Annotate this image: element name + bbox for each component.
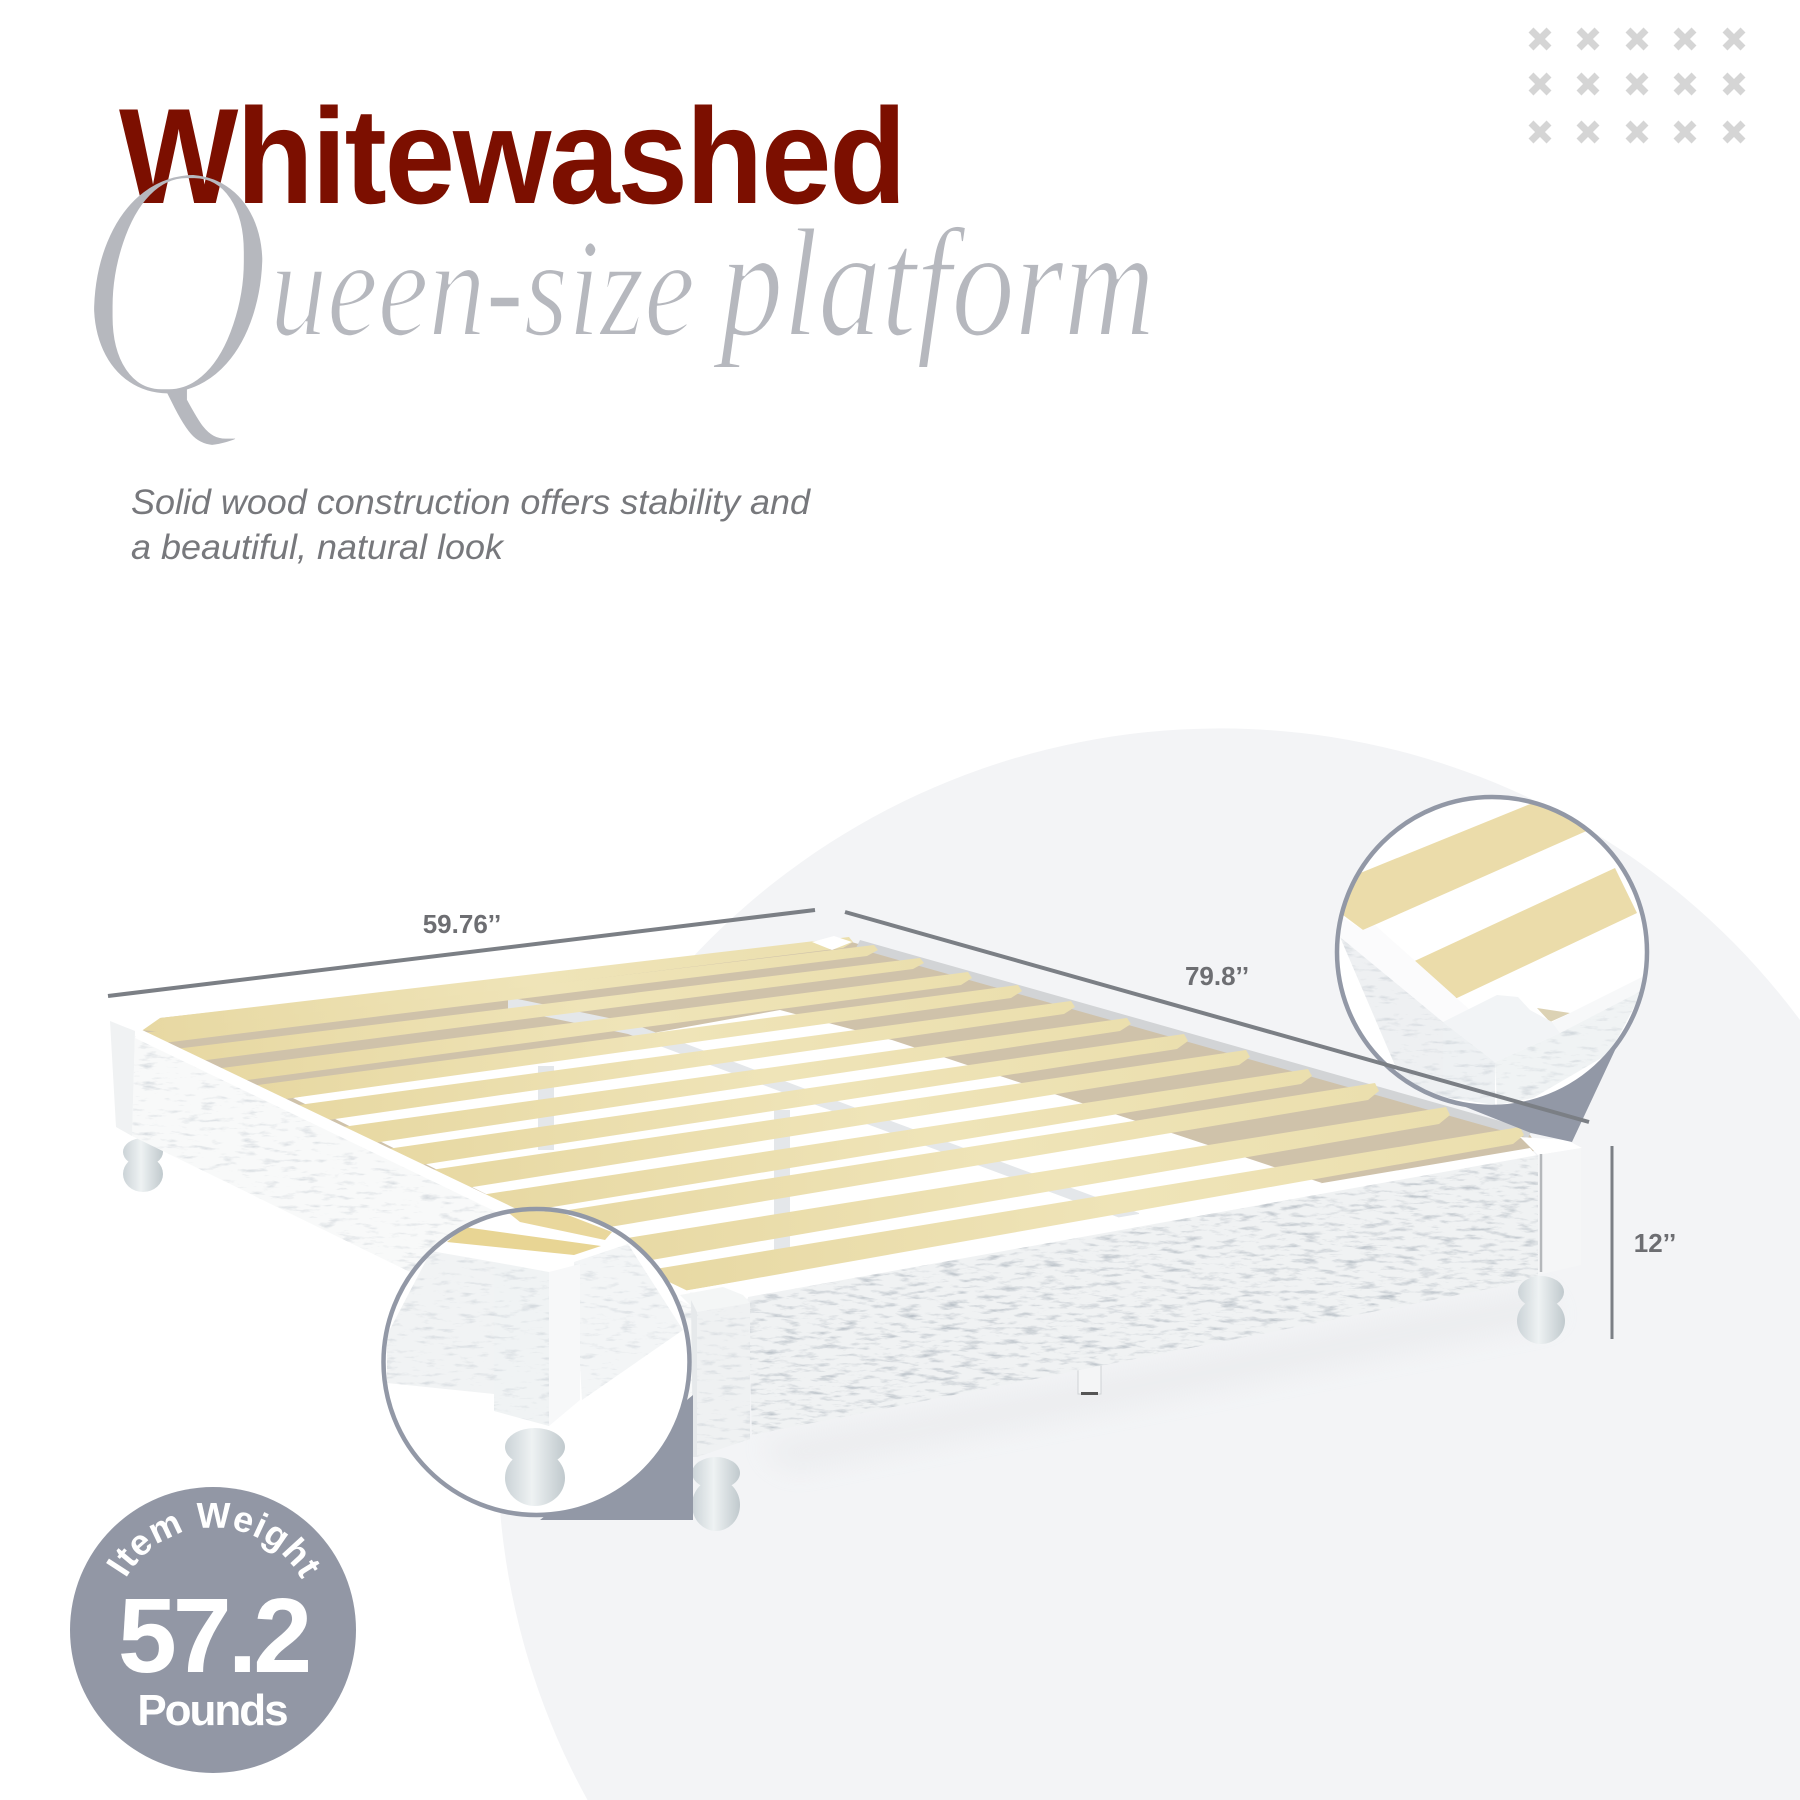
slats — [140, 937, 1524, 1293]
weight badge — [70, 1487, 356, 1773]
deck base — [140, 941, 1540, 1292]
callout: corner detail — [1337, 797, 1647, 1142]
decorative x pattern — [1531, 30, 1743, 141]
bed illustration — [110, 936, 1582, 1531]
script subtitle: platform — [712, 197, 1155, 369]
script subtitle: ueen-size — [270, 211, 695, 366]
right post — [1520, 1137, 1582, 1275]
front rail — [748, 1155, 1538, 1435]
back corner post — [812, 936, 852, 950]
dimension: height: 12’’ — [1634, 1228, 1676, 1258]
badge arc label: Item Weight — [106, 1503, 320, 1580]
script subtitle — [75, 92, 1155, 469]
left rail top strip — [135, 1028, 692, 1306]
lens ring — [1337, 797, 1647, 1107]
back foot — [123, 1138, 163, 1192]
front rail top face — [683, 1148, 1538, 1299]
badge number: 57.2 — [118, 1577, 308, 1695]
centre support leg — [1078, 1365, 1101, 1395]
front post — [680, 1287, 750, 1457]
lens white — [1337, 797, 1647, 1107]
lens white — [384, 1209, 690, 1515]
description text: a beautiful, natural look — [131, 528, 505, 567]
dimension: length — [845, 912, 1589, 1122]
front foot — [692, 1457, 740, 1531]
back left post — [110, 1018, 160, 1136]
script subtitle: Q — [75, 92, 271, 469]
badge unit: Pounds — [137, 1686, 287, 1735]
right side rail strip — [856, 940, 1532, 1138]
dimension: length: 79.8’’ — [1185, 961, 1249, 991]
dimension: width — [108, 909, 815, 996]
lens content — [1340, 800, 1643, 1105]
dimension: width: 59.76’’ — [423, 909, 501, 939]
white deck gap — [293, 1010, 1322, 1296]
centre legs and beam — [508, 997, 1139, 1250]
description text — [131, 483, 812, 567]
background circle — [498, 728, 1800, 1800]
callout tail — [540, 1395, 693, 1520]
callout tail — [1443, 1048, 1616, 1142]
right foot — [1517, 1276, 1565, 1344]
lens content — [387, 1210, 683, 1506]
floor shadow — [760, 1290, 1560, 1470]
callout: foot detail — [384, 1209, 693, 1520]
lens ring — [384, 1209, 690, 1515]
description text: Solid wood construction offers stability and — [131, 483, 812, 522]
title: Whitewashed — [119, 80, 905, 232]
left rail — [132, 1036, 692, 1410]
